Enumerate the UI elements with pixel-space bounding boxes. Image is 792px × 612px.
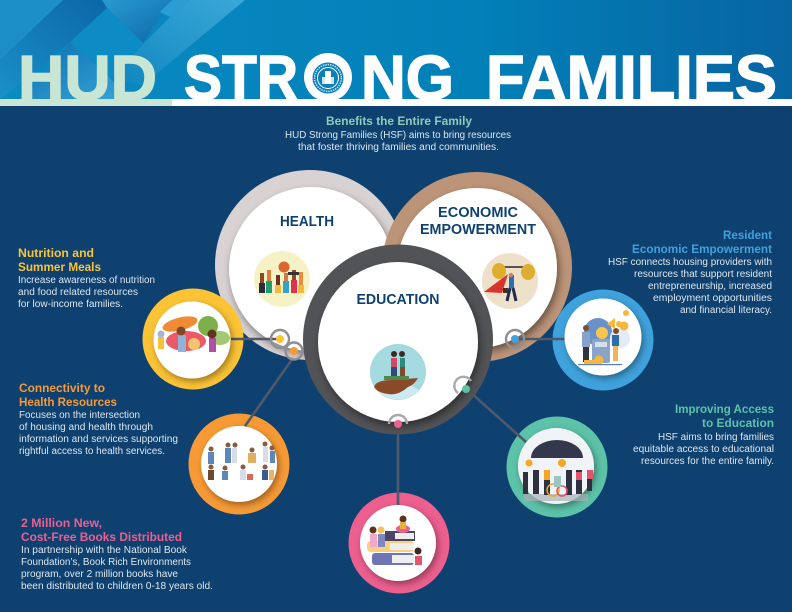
text: improving access to education: Improving Access <box>675 403 774 416</box>
heading: education: EDUCATION <box>356 292 440 308</box>
panel: books ring <box>348 492 450 594</box>
connector nodes <box>271 330 524 428</box>
intro text <box>285 115 511 153</box>
text: books distributed <box>21 517 213 592</box>
text: resident economic empowerment: and financial literacy. <box>680 305 772 316</box>
node: yellow <box>271 330 289 348</box>
text: nutrition and summer meals: Summer Meals <box>18 261 101 274</box>
heading: economic empowerment <box>420 205 536 238</box>
icon: hero lifting coins <box>482 253 538 309</box>
text: connectivity to health resources <box>19 382 178 457</box>
node: pink <box>389 415 407 428</box>
panel: resident empowerment ring <box>552 290 654 390</box>
panel: education access ring <box>506 416 608 518</box>
text: improving access to education: equitable access to educational <box>633 444 774 455</box>
text: nutrition and summer meals: and food related resources <box>18 287 138 298</box>
text: resident economic empowerment: Resident <box>723 229 772 242</box>
text: nutrition and summer meals <box>18 247 155 310</box>
icon: HUD seal <box>304 53 352 101</box>
text: books distributed: 2 Million New, <box>21 517 102 530</box>
text: books distributed: Foundation’s, Book Rich Environments <box>21 557 191 568</box>
text: resident economic empowerment <box>608 229 772 316</box>
node: orange <box>286 342 302 360</box>
icon: equitable access illustration <box>518 428 594 504</box>
panel: health resources ring <box>188 414 290 514</box>
panel: nutrition ring <box>142 288 244 390</box>
title: HUD Strong Families: FAMILIES <box>486 44 777 114</box>
text: improving access to education: to Education <box>702 417 774 430</box>
text: nutrition and summer meals: for low-income families. <box>18 299 123 310</box>
title: HUD Strong Families <box>0 44 792 114</box>
node: blue <box>506 330 524 348</box>
text: resident economic empowerment: resources that support resident <box>634 269 772 280</box>
icon: people on a hand <box>370 344 426 400</box>
title: HUD Strong Families: STR <box>184 44 298 114</box>
icon: raised hands <box>254 251 310 307</box>
heading: economic empowerment: ECONOMIC <box>438 205 519 221</box>
text: connectivity to health resources: of housing and health through <box>19 422 153 433</box>
text: improving access to education: HSF aims to bring families <box>658 432 774 443</box>
text: resident economic empowerment: employment opportunities <box>653 293 772 304</box>
panel: economic empowerment circle <box>382 172 572 362</box>
text: connectivity to health resources: rightful access to health services. <box>19 446 165 457</box>
panel: education circle <box>303 244 493 434</box>
heading: health: HEALTH <box>280 214 334 230</box>
text: books distributed: been distributed to children 0-18 years old. <box>21 581 213 592</box>
text: resident economic empowerment: Economic Empowerment <box>632 243 772 256</box>
icon: books illustration <box>360 505 436 581</box>
text: connectivity to health resources: Focuses on the intersection <box>19 410 140 421</box>
text: books distributed: In partnership with the National Book <box>21 545 187 556</box>
icon: nutrition illustration <box>154 302 230 378</box>
text: improving access to education: resources for the entire family. <box>641 456 774 467</box>
connector lines <box>231 339 565 505</box>
heading: economic empowerment: EMPOWERMENT <box>420 222 536 238</box>
text: connectivity to health resources: Health Resources <box>19 396 117 409</box>
intro text: that foster thriving families and communities. <box>298 142 499 153</box>
icon: resident finance illustration <box>564 298 642 376</box>
node: teal <box>454 377 471 393</box>
panel: health circle <box>215 170 405 360</box>
text: books distributed: Cost-Free Books Distributed <box>21 531 182 544</box>
icon: health resources illustration <box>201 426 277 502</box>
title: HUD Strong Families: O <box>303 44 353 114</box>
intro text: Benefits the Entire Family <box>326 115 473 128</box>
text: improving access to education <box>633 403 774 467</box>
title: HUD Strong Families: HUD <box>18 44 157 114</box>
text: connectivity to health resources: Connectivity to <box>19 382 105 395</box>
intro text: HUD Strong Families (HSF) aims to bring resources <box>285 130 511 141</box>
text: books distributed: program, over 2 million books have <box>21 569 179 580</box>
text: resident economic empowerment: entrepreneurship, increased <box>648 281 772 292</box>
text: nutrition and summer meals: Increase awareness of nutrition <box>18 275 155 286</box>
header banner <box>0 0 792 100</box>
text: resident economic empowerment: HSF connects housing providers with <box>608 257 772 268</box>
title: HUD Strong Families: NG <box>361 44 454 114</box>
text: nutrition and summer meals: Nutrition and <box>18 247 94 260</box>
text: connectivity to health resources: information and services supporting <box>19 434 178 445</box>
